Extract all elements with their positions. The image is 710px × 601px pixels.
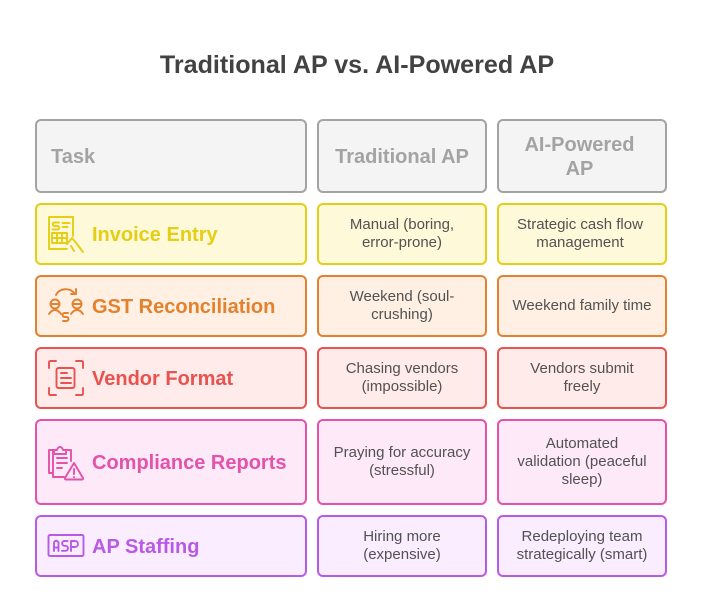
row label: GST reconciliation [35, 275, 307, 337]
row label: invoice entry [35, 203, 307, 265]
cell: staffing AI: Redeploying team [522, 528, 642, 545]
row label: compliance reports [35, 419, 307, 505]
header: AI-powered AP: AI-Powered [524, 134, 635, 156]
cell: invoice traditional [317, 203, 487, 265]
cell: invoice AI: Strategic cash flow [517, 216, 643, 233]
cell: invoice traditional: Manual (boring, [350, 216, 454, 233]
cell: GST AI [497, 275, 667, 337]
title: Traditional AP vs. AI-Powered AP [160, 51, 554, 79]
icon: invoice in hand [48, 216, 84, 253]
cell: staffing traditional: (expensive) [363, 546, 441, 563]
cell: invoice AI [497, 203, 667, 265]
cell: compliance AI: sleep) [562, 471, 602, 488]
row label: AP staffing [35, 515, 307, 577]
icon: people exchanging [48, 288, 84, 322]
row label: compliance reports: Compliance Reports [92, 452, 286, 474]
cell: compliance traditional [317, 419, 487, 505]
row label: vendor format: Vendor Format [92, 368, 233, 390]
header: task: Task [51, 146, 95, 168]
cell: GST traditional [317, 275, 487, 337]
header: traditional AP: Traditional AP [335, 146, 469, 168]
cell: compliance AI: validation (peaceful [517, 453, 647, 470]
icon: scanned document [48, 360, 84, 396]
header: task [35, 119, 307, 193]
cell: vendor AI: freely [564, 378, 600, 395]
cell: staffing AI: strategically (smart) [517, 546, 647, 563]
cell: invoice traditional: error-prone) [362, 234, 442, 251]
icon: RSP badge [48, 534, 84, 557]
cell: GST traditional: crushing) [371, 306, 433, 323]
row label: GST reconciliation: GST Reconciliation [92, 296, 275, 318]
cell: staffing traditional: Hiring more [363, 528, 441, 545]
icon: clipboard with warning [48, 446, 84, 480]
row label: AP staffing: AP Staffing [92, 536, 199, 558]
header: traditional AP [317, 119, 487, 193]
cell: vendor traditional: (impossible) [362, 378, 442, 395]
header: AI-powered AP: AP [566, 158, 593, 180]
cell: compliance traditional: Praying for accuracy [334, 444, 470, 461]
header: AI-powered AP [497, 119, 667, 193]
cell: GST traditional: Weekend (soul- [350, 288, 454, 305]
cell: staffing traditional [317, 515, 487, 577]
cell: vendor traditional [317, 347, 487, 409]
cell: compliance AI [497, 419, 667, 505]
cell: compliance AI: Automated [546, 435, 618, 452]
cell: vendor AI: Vendors submit [530, 360, 634, 377]
cell: staffing AI [497, 515, 667, 577]
cell: GST AI: Weekend family time [513, 297, 651, 314]
row label: vendor format [35, 347, 307, 409]
row label: invoice entry: Invoice Entry [92, 224, 218, 246]
cell: vendor traditional: Chasing vendors [346, 360, 458, 377]
cell: compliance traditional: (stressful) [369, 462, 435, 479]
cell: invoice AI: management [536, 234, 624, 251]
cell: vendor AI [497, 347, 667, 409]
